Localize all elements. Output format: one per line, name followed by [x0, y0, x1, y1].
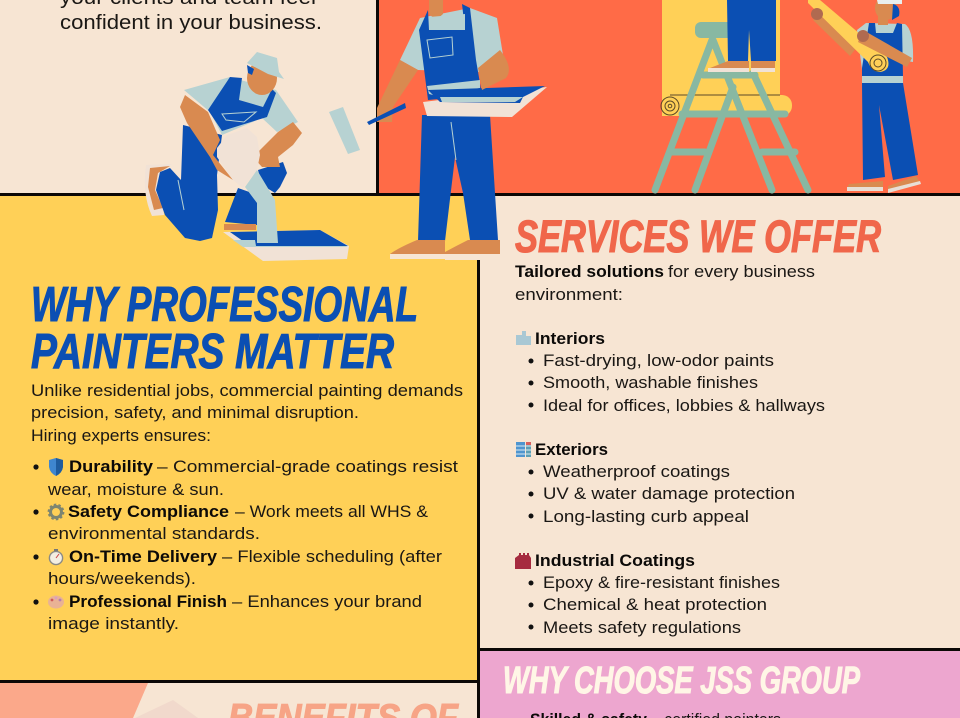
intro paragraph	[31, 382, 463, 445]
service: interiors: Smooth, washable finishes	[543, 374, 758, 392]
services intro: Tailored solutions	[515, 263, 664, 281]
list: on-time delivery: hours/weekends).	[48, 570, 196, 588]
service: industrial coatings: Meets safety regulations	[543, 619, 741, 637]
service: interiors: Interiors	[535, 330, 605, 348]
illustration: worker holding roll	[808, 0, 921, 193]
panel: why professional painters matter	[0, 196, 477, 681]
list: durability: – Commercial-grade coatings resist	[157, 458, 458, 476]
list: on-time delivery	[33, 548, 443, 588]
list: professional finish: Professional Finish	[69, 593, 227, 611]
panel: benefits of	[0, 683, 477, 718]
panel: why choose JSS group	[480, 651, 960, 718]
intro paragraph: Unlike residential jobs, commercial painting demands	[31, 382, 463, 400]
list: safety compliance	[33, 503, 428, 543]
list: durability: wear, moisture & sun.	[47, 481, 224, 499]
list: professional finish: image instantly.	[48, 615, 179, 633]
service: interiors: Ideal for offices, lobbies & hallways	[543, 397, 825, 415]
services intro: environment:	[515, 286, 623, 304]
intro paragraph: Hiring experts ensures:	[31, 427, 211, 445]
heading: WHY PROFESSIONAL	[31, 278, 418, 332]
list: durability: Durability	[69, 458, 154, 476]
service: exteriors: Exteriors	[535, 441, 608, 459]
list: safety compliance: Safety Compliance	[68, 503, 229, 521]
list: on-time delivery: – Flexible scheduling (after	[222, 548, 443, 566]
illustration: wallpaper on wall	[661, 0, 792, 116]
first list item, cut by page edge	[530, 711, 781, 718]
service: interiors	[516, 330, 825, 415]
service: exteriors: Long-lasting curb appeal	[543, 508, 749, 526]
panel: orange painters scene	[379, 0, 960, 194]
service: exteriors: Weatherproof coatings	[543, 463, 730, 481]
list: professional finish: – Enhances your brand	[232, 593, 422, 611]
list: professional finish	[33, 593, 422, 633]
services intro: for every business	[668, 263, 815, 281]
list: on-time delivery: On-Time Delivery	[69, 548, 218, 566]
illustration: ladder	[655, 22, 808, 190]
list: durability	[33, 458, 458, 499]
list: safety compliance: environmental standards.	[48, 525, 260, 543]
panel: services we offer	[480, 196, 960, 648]
service: industrial coatings: Chemical & heat protection	[543, 596, 767, 614]
service: industrial coatings: Epoxy & fire-resistant finishes	[543, 574, 780, 592]
service: interiors: Fast-drying, low-odor paints	[543, 352, 774, 370]
intro paragraph: precision, safety, and minimal disruption.	[31, 404, 359, 422]
services intro	[515, 263, 815, 304]
heading: PAINTERS MATTER	[31, 325, 394, 379]
service: industrial coatings: Industrial Coatings	[535, 552, 695, 570]
intro text: confident in your business.	[60, 12, 322, 34]
icon: house roof	[135, 700, 198, 718]
illustration: painter on ladder legs	[708, 0, 776, 72]
service: exteriors	[516, 441, 795, 526]
intro text	[60, 0, 322, 34]
heading	[31, 278, 418, 379]
list: safety compliance: – Work meets all WHS &	[235, 503, 428, 521]
illustration: paint roller	[329, 107, 360, 154]
illustration: standing painter with tray	[367, 0, 547, 260]
service: exteriors: UV & water damage protection	[543, 485, 795, 503]
service: industrial coatings	[515, 552, 780, 637]
panel: intro	[0, 0, 377, 194]
illustration: kneeling painter pouring paint	[145, 52, 349, 261]
